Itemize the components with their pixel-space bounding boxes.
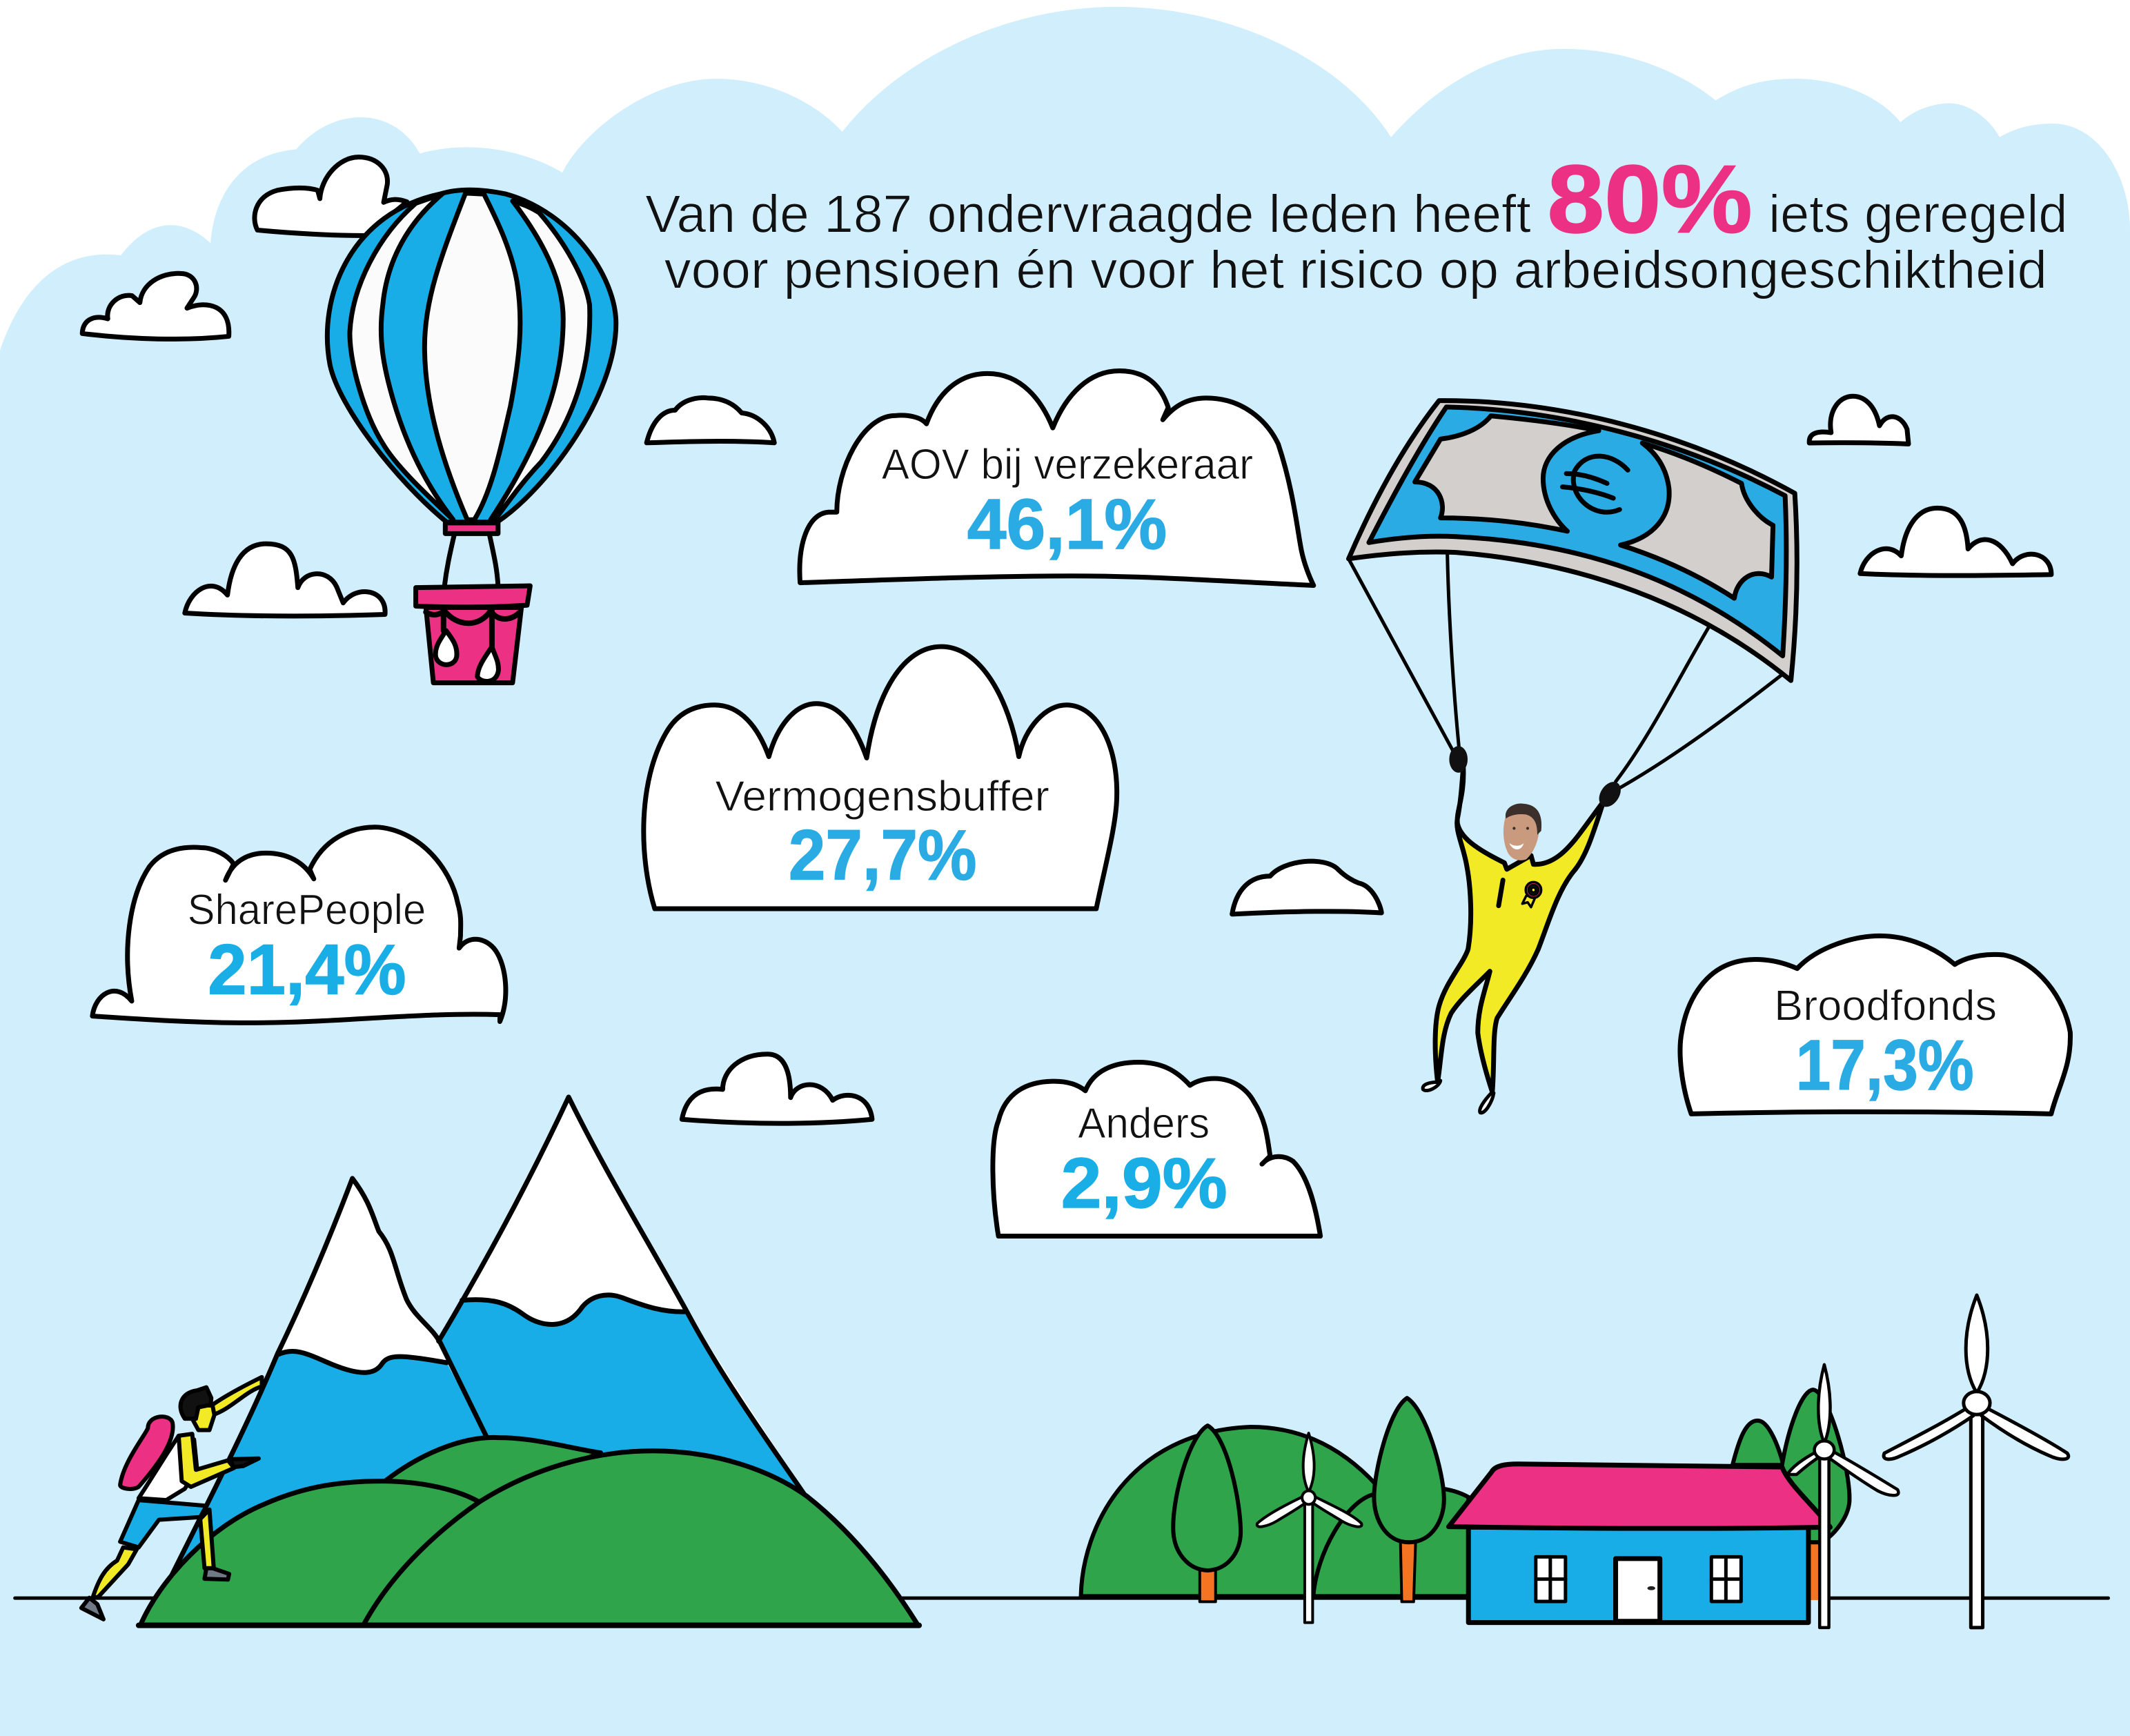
data cloud: AOV bij verzekeraar: AOV bij verzekeraar bbox=[882, 441, 1253, 489]
data cloud: SharePeople: 21,4% bbox=[208, 929, 406, 1009]
trees behind house bbox=[1733, 1390, 1849, 1600]
parachutist with banknote bbox=[1348, 401, 1797, 1113]
small wind turbine bbox=[1257, 1433, 1361, 1623]
data cloud: SharePeople: SharePeople bbox=[188, 887, 426, 934]
data cloud: Broodfonds: 17,3% bbox=[1796, 1025, 1974, 1105]
hot air balloon bbox=[327, 190, 616, 683]
title: iets geregeld bbox=[1768, 185, 2067, 244]
middle wind turbine bbox=[1787, 1365, 1898, 1628]
tree middle with trunk bbox=[1374, 1398, 1444, 1601]
balloon collar and ropes bbox=[444, 523, 498, 586]
small mountain bbox=[160, 1178, 490, 1599]
data cloud: Broodfonds: Broodfonds bbox=[1774, 982, 1997, 1029]
data cloud: SharePeople bbox=[92, 827, 506, 1023]
head portrait bbox=[1503, 804, 1541, 860]
person in yellow suit bbox=[1423, 767, 1604, 1113]
data cloud: Vermogensbuffer: 27,7% bbox=[789, 815, 977, 895]
data cloud: Anders bbox=[993, 1063, 1321, 1236]
big mountain bbox=[439, 1097, 807, 1568]
hands bbox=[1449, 746, 1625, 811]
ground line bbox=[15, 1597, 2109, 1600]
data cloud: AOV bij verzekeraar bbox=[800, 371, 1314, 586]
small clouds, centre and right bbox=[647, 397, 1381, 1123]
title bbox=[645, 145, 2067, 299]
data cloud: Vermogensbuffer: Vermogensbuffer bbox=[716, 773, 1049, 820]
euro symbol bbox=[1562, 456, 1628, 512]
data cloud: Vermogensbuffer bbox=[644, 647, 1117, 909]
clouds at upper right bbox=[1809, 396, 2051, 575]
data cloud: Anders: Anders bbox=[1078, 1100, 1210, 1147]
green hills bbox=[139, 1437, 919, 1626]
data cloud: Anders: 2,9% bbox=[1061, 1143, 1227, 1223]
parachute strings bbox=[1348, 553, 1783, 787]
banknote parachute bbox=[1348, 401, 1797, 680]
house bbox=[1448, 1464, 1831, 1623]
large wind turbine bbox=[1884, 1295, 2069, 1628]
village with house, trees and wind turbines bbox=[1081, 1295, 2069, 1628]
hiker bbox=[81, 1377, 262, 1619]
title: voor pensioen én voor het risico op arbeidsongeschiktheid bbox=[664, 240, 2047, 299]
title: Van de 187 ondervraagde leden heeft bbox=[645, 185, 1531, 244]
rosette badge bbox=[1522, 882, 1541, 907]
basket bbox=[416, 586, 530, 683]
tree left with trunk bbox=[1173, 1426, 1241, 1601]
small decorative clouds, left bbox=[82, 157, 407, 616]
data cloud: Broodfonds bbox=[1680, 936, 2071, 1114]
mountains with hiker bbox=[81, 1097, 919, 1626]
balloon envelope bbox=[327, 190, 616, 522]
green hills behind house bbox=[1081, 1427, 1468, 1596]
data cloud: AOV bij verzekeraar: 46,1% bbox=[967, 484, 1167, 564]
title: 80% bbox=[1547, 145, 1753, 253]
